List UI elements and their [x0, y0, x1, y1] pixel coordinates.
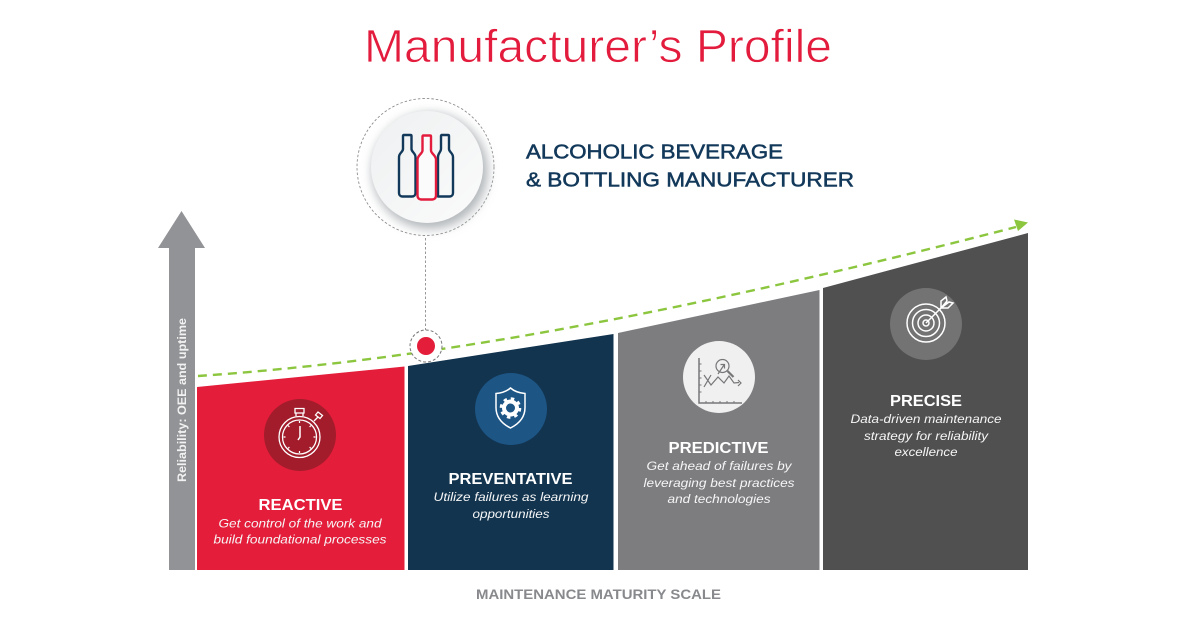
panel: precise	[823, 233, 1028, 570]
text: reactive: REACTIVE	[258, 497, 343, 514]
text: predictive: and technologies	[668, 492, 770, 506]
icon: shield with gear	[475, 373, 547, 445]
icon: chart with magnifier	[683, 341, 755, 413]
x-axis label: MAINTENANCE MATURITY SCALE	[476, 586, 721, 602]
text: preventative: Utilize failures as learning	[434, 490, 589, 504]
icon: right bottle	[438, 135, 453, 196]
text: preventative: opportunities	[472, 507, 550, 521]
icon: centre bottle	[418, 136, 436, 200]
connector line	[424, 238, 426, 330]
text: preventative: PREVENTATIVE	[448, 471, 573, 488]
text: precise: strategy for reliability	[864, 429, 989, 443]
icon: left bottle	[399, 135, 416, 196]
title: Manufacturer’s Profile	[364, 20, 832, 72]
y-axis label: Reliability: OEE and uptime	[175, 318, 189, 482]
text: preventative	[434, 471, 589, 521]
marker: current position	[410, 330, 442, 362]
text: precise: Data-driven maintenance	[850, 412, 1002, 426]
text: predictive: PREDICTIVE	[668, 440, 769, 457]
text: precise	[850, 393, 1002, 459]
text: predictive: leveraging best practices	[644, 476, 794, 490]
y-axis arrow	[158, 211, 205, 570]
panel: predictive	[618, 290, 820, 570]
text: precise: PRECISE	[890, 393, 962, 410]
text: reactive: build foundational processes	[214, 532, 386, 546]
text: reactive	[214, 497, 386, 546]
text: reactive: Get control of the work and	[218, 516, 383, 530]
panel: preventative	[408, 334, 614, 570]
icon: stopwatch	[264, 399, 336, 471]
heading: industry	[526, 142, 854, 192]
panel: reactive	[197, 366, 404, 570]
text: precise: excellence	[894, 445, 958, 459]
dashed growth arrow	[198, 220, 1028, 376]
heading: industry: & BOTTLING MANUFACTURER	[526, 170, 854, 192]
text: predictive	[644, 440, 794, 506]
icon: target with arrow	[890, 288, 962, 360]
heading: industry: ALCOHOLIC BEVERAGE	[526, 142, 783, 164]
text: predictive: Get ahead of failures by	[646, 459, 793, 473]
icon: bottles medallion	[357, 98, 494, 236]
